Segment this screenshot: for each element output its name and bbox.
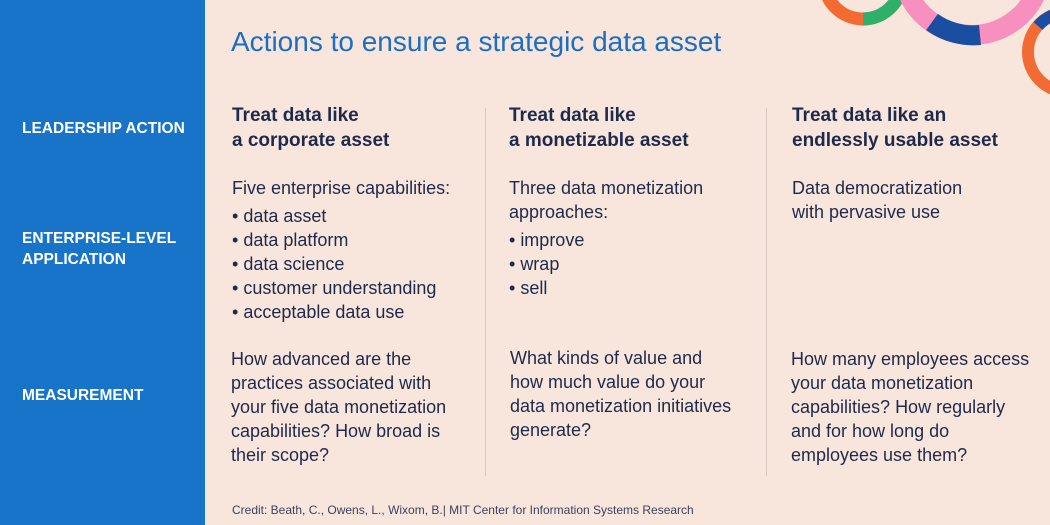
measurement 1: How advanced are the practices associated with your five data monetization capabilities? How broad is their scope? — [231, 349, 446, 465]
heading 3 — [792, 105, 998, 151]
application 3: with pervasive use — [792, 202, 940, 222]
heading 1 — [232, 105, 390, 151]
application 2: Three data monetization — [509, 178, 703, 198]
application 1: acceptable data use — [243, 302, 404, 322]
label: enterprise-level application: APPLICATION — [22, 251, 126, 268]
column 1 — [232, 105, 450, 322]
column 3 — [792, 105, 998, 222]
label: leadership action: LEADERSHIP ACTION — [22, 120, 185, 137]
label: measurement: MEASUREMENT — [22, 387, 143, 404]
label: enterprise-level application: ENTERPRISE-LEVEL — [22, 230, 176, 247]
sidebar — [0, 0, 205, 525]
application 2: improve — [520, 230, 584, 250]
heading 1: a corporate asset — [232, 130, 389, 151]
application 1: Five enterprise capabilities: — [232, 178, 450, 198]
application 1: data science — [243, 254, 344, 274]
column 2 — [509, 105, 703, 298]
heading 2 — [509, 105, 689, 151]
credit: Credit: Beath, C., Owens, L., Wixom, B.| MIT Center for Information Systems Research — [232, 503, 694, 517]
heading 3: endlessly usable asset — [792, 130, 998, 151]
heading 1: Treat data like — [232, 105, 359, 126]
measurement 2: What kinds of value and how much value do your data monetization initiatives generate? — [510, 348, 731, 440]
application 2: approaches: — [509, 202, 608, 222]
application 3: Data democratization — [792, 178, 962, 198]
application 2: sell — [520, 278, 547, 298]
measurement 3: How many employees access your data monetization capabilities? How regularly and for how long do employees use them? — [791, 349, 1029, 465]
heading 2: a monetizable asset — [509, 130, 689, 151]
application 1: data platform — [243, 230, 348, 250]
label: enterprise-level application — [22, 230, 176, 268]
title: Actions to ensure a strategic data asset — [231, 26, 721, 57]
application 2: wrap — [520, 254, 559, 274]
application 1: customer understanding — [243, 278, 436, 298]
application 1 — [232, 178, 450, 322]
application 1: data asset — [243, 206, 326, 226]
application 2 — [509, 178, 703, 298]
heading 3: Treat data like an — [792, 105, 946, 126]
heading 2: Treat data like — [509, 105, 636, 126]
application 3 — [792, 178, 962, 222]
